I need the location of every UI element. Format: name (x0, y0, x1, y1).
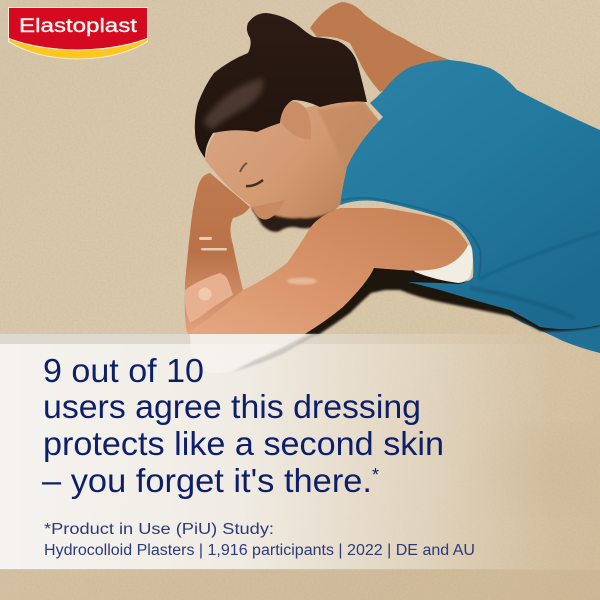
raised arm behind head (310, 2, 450, 92)
ear (280, 101, 311, 139)
heading (42, 352, 444, 499)
footnote: *Product in Use (PiU) Study: (44, 521, 274, 538)
hair (195, 13, 367, 158)
logo yellow arc (9, 39, 147, 58)
upright forearm (185, 173, 250, 333)
logo red field (9, 8, 147, 50)
heading: – you forget it's there. (42, 462, 372, 499)
footnote: Hydrocolloid Plasters | 1,916 participants | 2022 | DE and AU (44, 542, 475, 559)
sand specks on forearm (199, 237, 227, 250)
heading: 9 out of 10 (43, 352, 204, 389)
hair highlight (203, 78, 263, 130)
heading: * (372, 465, 379, 485)
face shadow (252, 208, 338, 232)
shirt fold lines (342, 198, 600, 318)
sheen on arm (287, 278, 317, 284)
heading: users agree this dressing (43, 388, 421, 425)
logo wordmark: Elastoplast (19, 16, 138, 37)
arm ghost through panel (190, 334, 312, 373)
photo: woman lying on sand (185, 2, 600, 353)
panel body (0, 344, 600, 569)
blue shirt (340, 60, 600, 329)
text panel (0, 334, 600, 569)
upper arm (187, 208, 468, 335)
ground shadow (303, 262, 600, 335)
closed eye and brow (240, 163, 263, 186)
logo border (8, 7, 148, 60)
heading: protects like a second skin (43, 425, 444, 462)
panel top band (0, 334, 600, 344)
nose and mouth (252, 200, 285, 220)
plaster on elbow (185, 273, 233, 323)
shirt flap on ground (500, 310, 600, 353)
white undergarment (412, 245, 473, 283)
footnote (44, 521, 475, 559)
logo: Elastoplast (8, 7, 148, 60)
neck and face (205, 100, 380, 224)
neck shading (318, 103, 378, 170)
